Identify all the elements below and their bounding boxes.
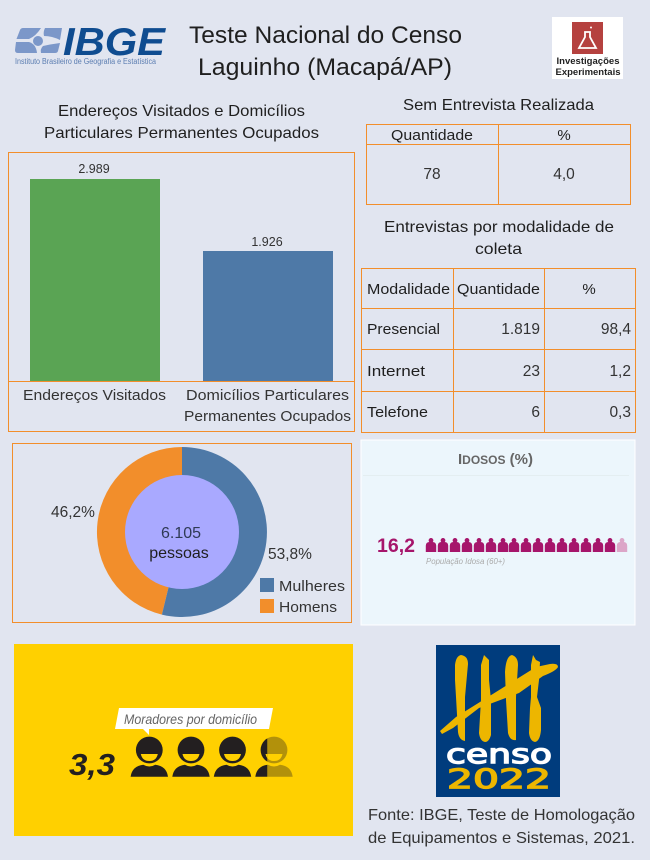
table: modalidade: Modalidade (367, 281, 450, 298)
legend (260, 578, 345, 616)
idosos pictogram (426, 538, 627, 552)
donut percent labels (51, 504, 312, 563)
source note (368, 807, 635, 847)
logo: IBGE: IBGE (63, 21, 166, 64)
donut percent labels: 46,2% (51, 504, 95, 521)
table: modalidade: 1,2 (609, 363, 631, 380)
bar value labels (78, 162, 283, 249)
table: sem entrevista: % (557, 127, 571, 144)
donut centre: pessoas (149, 545, 209, 562)
speech bubble (115, 708, 273, 735)
heading: entrevistas por modalidade: Entrevistas por modalidade de (384, 219, 614, 236)
panel: donut chart (12, 444, 352, 622)
logo: IBGE: Instituto Brasileiro de Geografia e Estatística (15, 57, 156, 66)
source note: de Equipamentos e Sistemas, 2021. (368, 830, 635, 847)
bar value labels: 2.989 (78, 162, 110, 176)
title: Laguinho (Macapá/AP) (198, 54, 452, 81)
table: modalidade (361, 268, 636, 432)
table: sem entrevista: Quantidade (391, 127, 473, 144)
heading: bar chart (44, 103, 319, 142)
donut: Homens (97, 447, 182, 615)
source note: Fonte: IBGE, Teste de Homologação (368, 807, 635, 824)
panel: idosos (361, 440, 635, 625)
bar chart (8, 152, 354, 432)
logo: Investigações Experimentais (552, 17, 623, 79)
table: sem entrevista: 4,0 (553, 166, 575, 183)
logo: Investigações Experimentais: Experimentais (556, 67, 620, 78)
panel: moradores por domicílio (14, 644, 353, 836)
logo: Censo 2022 (436, 645, 560, 797)
idosos heading: IDOSOS (%) (458, 451, 533, 468)
bar category labels (23, 387, 351, 425)
table: sem entrevista (366, 124, 630, 204)
donut centre: 6.105 (161, 525, 201, 542)
title: Teste Nacional do Censo (189, 22, 462, 49)
table: modalidade: % (582, 281, 596, 298)
heading: bar chart: Endereços Visitados e Domicílios (58, 103, 305, 120)
donut percent labels: 53,8% (268, 546, 312, 563)
table: sem entrevista: 78 (423, 166, 441, 183)
table: modalidade: 23 (523, 363, 540, 380)
table: modalidade: 0,3 (609, 404, 631, 421)
logo: IBGE (15, 21, 166, 66)
donut centre (125, 475, 239, 589)
logo: Investigações Experimentais: Investigações (556, 56, 620, 67)
donut: Mulheres (162, 447, 267, 617)
table: modalidade: Quantidade (457, 281, 540, 298)
speech bubble: Moradores por domicílio (124, 711, 257, 727)
heading: entrevistas por modalidade (384, 219, 614, 258)
table: modalidade: Internet (367, 363, 426, 380)
table: modalidade: 98,4 (601, 321, 631, 338)
person icons (131, 737, 293, 777)
heading: entrevistas por modalidade: coleta (475, 241, 522, 258)
moradores value: 3,3 (69, 747, 115, 782)
bar category labels: Endereços Visitados (23, 387, 166, 404)
bar: Domicílios (203, 251, 333, 381)
bar category labels: Domicílios Particulares (186, 387, 349, 404)
tally marks (440, 655, 558, 742)
legend: Mulheres (279, 578, 345, 595)
heading: sem entrevista: Sem Entrevista Realizada (403, 97, 594, 114)
bar value labels: 1.926 (251, 235, 283, 249)
idosos caption: População Idosa (60+) (426, 557, 505, 566)
heading: bar chart: Particulares Permanentes Ocupados (44, 125, 319, 142)
table: modalidade: 1.819 (501, 321, 540, 338)
bar: Endereços Visitados (30, 179, 160, 381)
logo: Censo 2022: censo (446, 739, 552, 770)
bar category labels: Permanentes Ocupados (184, 408, 351, 425)
table: modalidade: Presencial (367, 321, 440, 338)
idosos value: 16,2 (377, 535, 415, 557)
logo: Censo 2022: 2022 (447, 764, 551, 795)
table: modalidade: 6 (531, 404, 540, 421)
legend: Homens (279, 599, 337, 616)
title (189, 22, 462, 81)
table: modalidade: Telefone (367, 404, 428, 421)
